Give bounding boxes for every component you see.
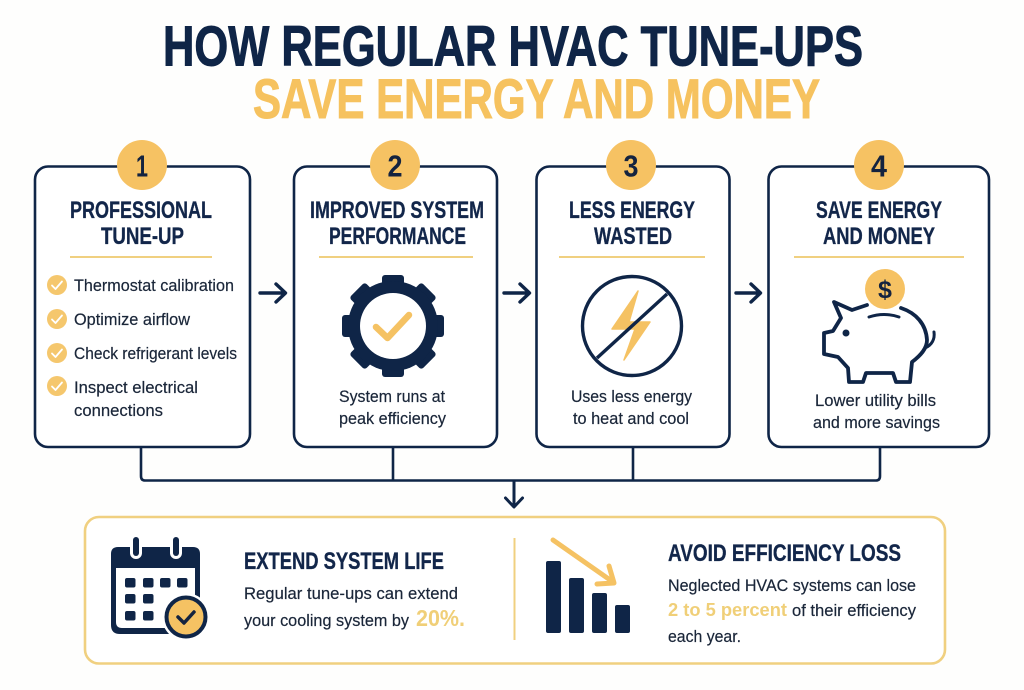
heading: professional tune-up: TUNE-UP: [101, 223, 184, 250]
arrow: step 2 to 3: [504, 284, 530, 302]
text: extend system life: EXTEND SYSTEM LIFE: [244, 548, 444, 575]
description: system runs at peak efficiency: [339, 387, 446, 428]
step number 1: [117, 140, 167, 190]
checklist: [47, 275, 237, 420]
description: lower utility bills: Lower utility bills: [815, 391, 936, 410]
step number 2: 2: [388, 148, 402, 184]
panel: step 4 save energy and money: [768, 140, 989, 447]
heading: save energy and money: AND MONEY: [823, 223, 935, 250]
icon: piggy bank with coin: $: [878, 276, 892, 304]
text: avoid efficiency loss: each year.: [668, 627, 741, 646]
step number 3: 3: [624, 148, 638, 184]
icon: piggy bank with coin: [824, 269, 934, 382]
check item: thermostat calibration: Thermostat calibration: [74, 276, 234, 295]
panel: step 2 improved system performance: [294, 140, 497, 447]
check item: optimize airflow: Optimize airflow: [74, 310, 191, 329]
description: system runs at peak efficiency: peak efficiency: [339, 409, 446, 428]
heading: save energy and money: SAVE ENERGY: [816, 197, 942, 224]
heading: professional tune-up: PROFESSIONAL: [70, 197, 212, 224]
icon: gear with check: [342, 275, 444, 377]
description: uses less energy: Uses less energy: [571, 387, 692, 406]
heading: save energy and money: [816, 197, 942, 250]
step number 1: 1: [136, 148, 148, 184]
connector lines from cards to benefits: [141, 447, 880, 507]
description: uses less energy: [571, 387, 692, 428]
step number 3: [606, 140, 656, 190]
text: extend system life: your cooling system by: [244, 611, 409, 630]
text: extend system life: 20%.: [416, 605, 465, 631]
heading: less energy wasted: WASTED: [594, 223, 672, 250]
heading: improved system performance: PERFORMANCE: [329, 223, 466, 250]
heading: less energy wasted: [569, 197, 695, 250]
check item: check refrigerant levels: Check refrigerant levels: [74, 344, 237, 363]
description: uses less energy: to heat and cool: [573, 409, 689, 428]
title: [163, 14, 863, 130]
heading: professional tune-up: [70, 197, 212, 250]
arrow: step 3 to 4: [736, 284, 760, 302]
step number 4: 4: [871, 148, 888, 184]
description: lower utility bills: [813, 391, 940, 432]
panel: step 3 less energy wasted: [536, 140, 730, 447]
heading: improved system performance: IMPROVED SYSTEM: [310, 197, 484, 224]
text: extend system life: Regular tune-ups can extend: [244, 584, 458, 603]
description: system runs at peak efficiency: System runs at: [339, 387, 445, 406]
text: avoid efficiency loss: of their efficiency: [792, 601, 916, 620]
icon: calendar with check: [111, 537, 210, 641]
text: avoid efficiency loss: AVOID EFFICIENCY LOSS: [668, 540, 901, 567]
step number 4: [854, 140, 904, 190]
description: lower utility bills: and more savings: [813, 413, 940, 432]
step number 2: [370, 140, 420, 190]
check item: inspect electrical connections: connections: [74, 401, 163, 420]
heading: less energy wasted: LESS ENERGY: [569, 197, 695, 224]
heading: improved system performance: [310, 197, 484, 250]
text: avoid efficiency loss: 2 to 5 percent: [668, 600, 787, 620]
panel: long-term benefits: [85, 517, 945, 664]
text: avoid efficiency loss: [668, 540, 916, 646]
text: extend system life: [244, 548, 465, 631]
icon: declining bar chart with arrow: [546, 540, 630, 633]
icon: crossed-out lightning bolt: [582, 276, 682, 376]
check item: inspect electrical connections: Inspect electrical: [74, 378, 198, 397]
text: avoid efficiency loss: Neglected HVAC systems can lose: [668, 576, 916, 595]
title: SAVE ENERGY AND MONEY: [253, 67, 820, 130]
check item: inspect electrical connections: [47, 376, 198, 420]
panel: step 1 professional tune-up: [35, 140, 250, 447]
arrow: step 1 to 2: [260, 284, 286, 302]
